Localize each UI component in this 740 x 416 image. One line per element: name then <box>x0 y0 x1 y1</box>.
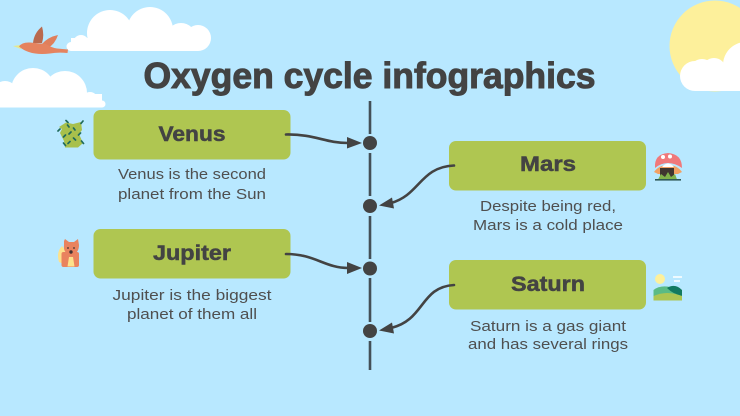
Venus description: planet from the Sun <box>118 187 266 203</box>
panel: Jupiter <box>94 229 290 323</box>
Mars description: Mars is a cold place <box>473 218 623 234</box>
icon: vine plant <box>58 120 84 148</box>
Venus description: Venus is the second <box>118 167 266 183</box>
icon: fox <box>58 239 79 267</box>
icon: mushroom house <box>654 153 682 181</box>
Jupiter description: planet of them all <box>127 307 257 323</box>
title: Oxygen cycle infographics <box>144 55 596 96</box>
Jupiter label box <box>94 229 290 278</box>
Venus heading: Venus <box>158 123 226 146</box>
Mars description: Despite being red, <box>480 199 616 215</box>
Jupiter description: Jupiter is the biggest <box>112 288 272 304</box>
icon: sun with cloud <box>670 0 740 92</box>
Saturn description: Saturn is a gas giant <box>470 319 626 335</box>
arrow: Venus to timeline <box>286 134 362 148</box>
panel: Mars <box>449 141 646 234</box>
Mars label box <box>449 141 646 190</box>
arrow: Saturn to timeline <box>379 285 454 334</box>
cloud: top <box>66 7 211 51</box>
Jupiter heading: Jupiter <box>153 242 231 265</box>
icon: bird <box>13 26 68 54</box>
arrow: Mars to timeline <box>379 166 454 208</box>
Saturn heading: Saturn <box>511 273 585 296</box>
timeline <box>363 101 377 370</box>
icon: landscape <box>654 274 682 300</box>
arrow: Jupiter to timeline <box>286 254 362 274</box>
panel: Saturn <box>449 260 646 353</box>
panel: Venus <box>94 110 290 203</box>
cloud: left <box>0 68 106 108</box>
Saturn label box <box>449 260 646 310</box>
Mars heading: Mars <box>520 153 576 176</box>
Venus label box <box>94 110 290 160</box>
Saturn description: and has several rings <box>468 337 628 353</box>
